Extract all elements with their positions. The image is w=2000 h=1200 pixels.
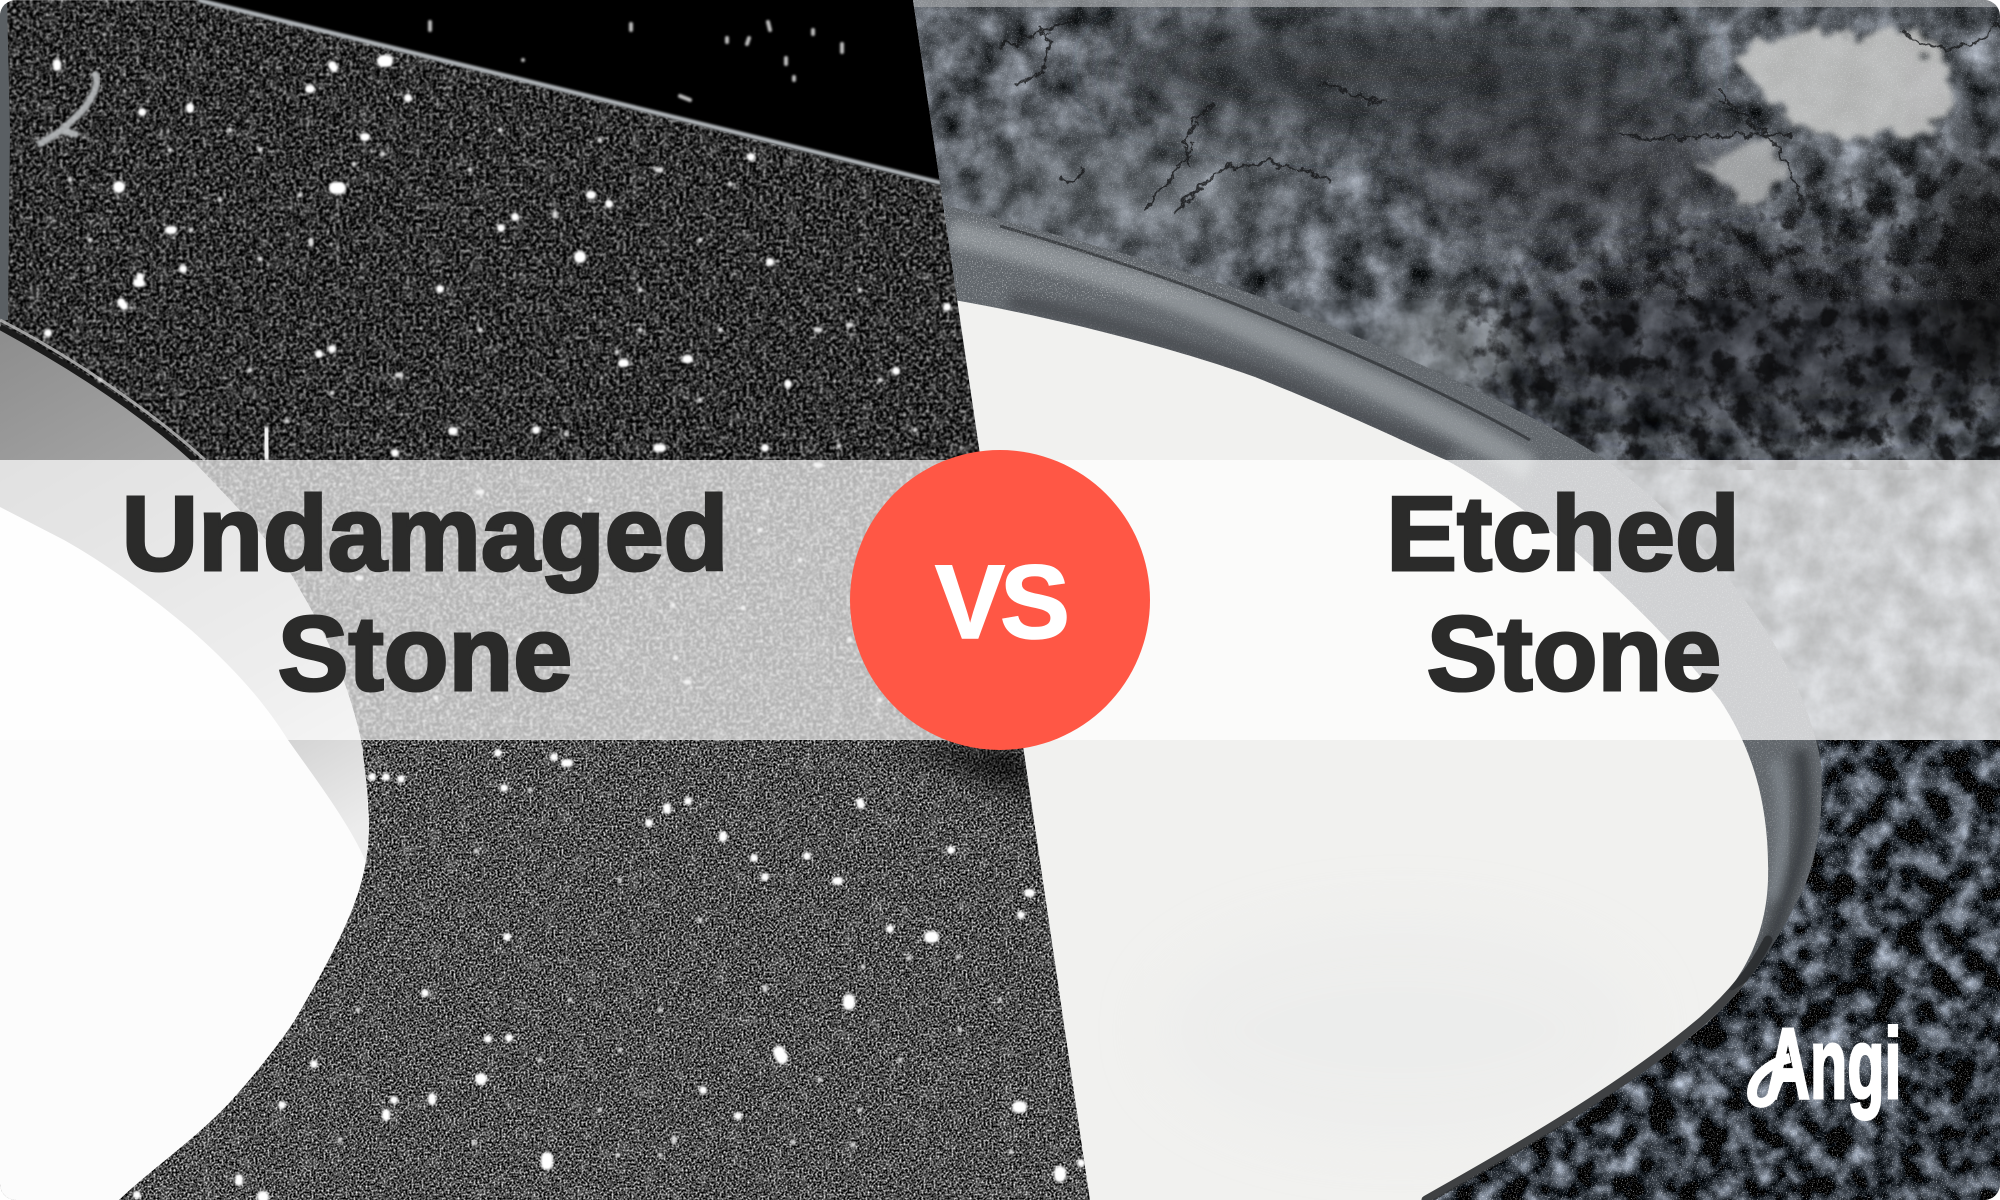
panel: undamaged stone photo [0,0,1100,1200]
sparkles [48,61,1081,1197]
white sink basin [930,296,1768,1200]
VS badge: VS [935,544,1066,661]
light vein [38,72,97,145]
sparkles: medium [48,63,1081,1195]
dark shadow at lower divider [880,745,1040,800]
speckles on lower right stone [1430,740,2000,1200]
panel: etched stone photo [900,0,2000,1200]
heading: Undamaged Stone [122,475,728,713]
tonal blobs of etched stone [913,0,2000,430]
heading: Etched Stone: Stone [1427,595,1721,713]
soft mottling on granite [0,0,1100,1200]
translucent white title band [0,460,2000,740]
rim highlight band [950,232,1530,468]
backsplash edge highlight [198,0,941,183]
dark upper zone [1100,15,1700,125]
heading: Etched Stone: Etched [1386,475,1740,593]
rim texture [900,190,1900,990]
heading: Undamaged Stone: Undamaged [122,475,728,593]
heading: Undamaged Stone: Stone [278,595,572,713]
sparkles: small [70,130,1011,1155]
rim base colour [900,190,1900,990]
fine speckle over etched stone [913,0,2000,300]
rim blue highlight [1772,760,1783,900]
basin subtle shading [1160,920,1640,1140]
etched rim around sink [900,190,1900,1015]
sparkles: large [119,61,1060,1197]
rim dark lower band [1010,300,1450,455]
rim white glint [265,427,268,460]
rim lower shading [1725,750,1804,1015]
logo: Angi: Angi [1766,1007,1901,1120]
rim dark groove [1000,226,1530,440]
VS badge [850,450,1150,750]
black backsplash wedge [198,0,941,186]
surface cracks [1000,20,2000,215]
heading: Etched Stone [1386,475,1740,713]
mottled stone surface [900,0,2000,760]
wedge specks [430,22,842,100]
granite countertop upper [0,0,1000,740]
granite countertop lower [0,740,1100,1200]
sink rim gray surface [0,327,368,862]
white sink surface [0,462,369,1200]
lower right cracked stone base [1432,740,2000,1200]
sink rim dark line [0,327,195,460]
pale etched patch [1708,33,1955,208]
dark edge between sink and cracked stone [1426,940,1768,1200]
dark crack network [1300,100,2000,470]
sink rim light line [0,320,205,460]
lower right cell texture [1430,740,2000,1200]
left stone edge strip [0,0,10,320]
